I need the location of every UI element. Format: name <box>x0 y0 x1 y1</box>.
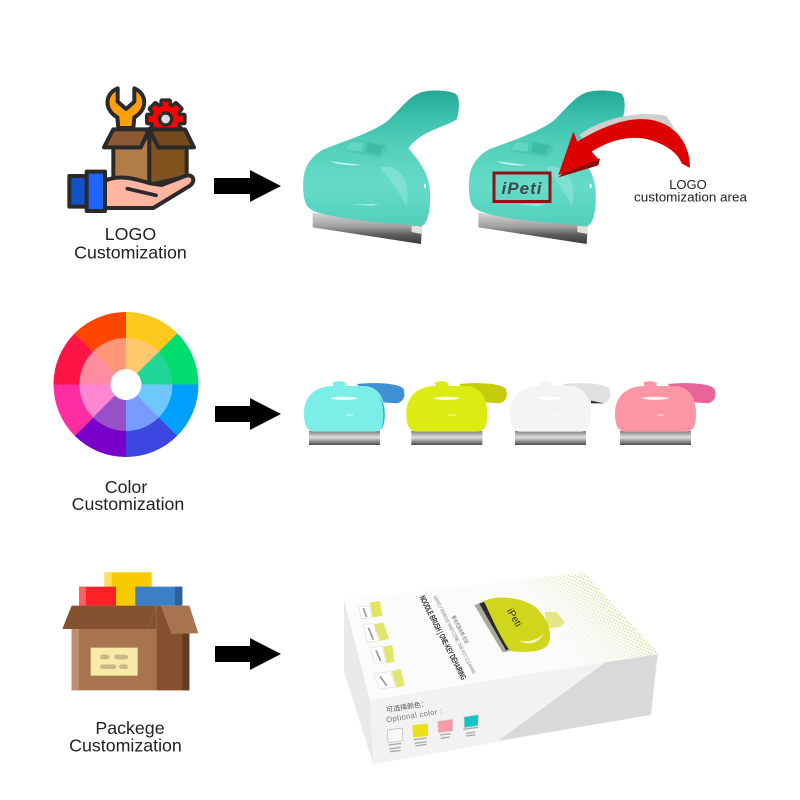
optional colour panel <box>386 699 478 752</box>
lid headline text: 推毛式脱毛梳 拉钮 <box>450 614 470 645</box>
product photo on lid <box>474 598 565 652</box>
icon: colour wheel <box>53 312 199 457</box>
heading: Packege Customization: Packege <box>95 718 165 738</box>
heading: Packege Customization: Customization <box>69 736 182 756</box>
heading: LOGO Customization: LOGO <box>105 224 156 244</box>
optional colour panel: 可选择颜色： <box>386 699 428 714</box>
heading: Color Customization: Customization <box>72 494 184 514</box>
arrow: colour row <box>215 398 281 430</box>
callout: LOGO customization area: customization area <box>634 190 748 204</box>
lid headline text: NOODLE BRUSH | ONE-KEY DEHAIRING <box>418 594 469 681</box>
product photo on lid: iPeti <box>504 607 523 629</box>
logo box: iPeti: iPeti <box>502 179 543 198</box>
callout: LOGO customization area: LOGO <box>669 177 707 192</box>
heading: LOGO Customization: Customization <box>74 242 187 262</box>
feature tags <box>359 601 405 689</box>
icon: hand holding box with tools <box>69 88 194 211</box>
arrow: logo row <box>214 170 281 202</box>
logo box: iPeti <box>494 173 550 202</box>
product row: four colour variants <box>304 381 715 445</box>
arrow: package row <box>215 638 281 670</box>
icon: open package box <box>62 572 198 690</box>
lid headline text: GENTLY REMOVE HAIR COMB, ONE-KEY CLEANING <box>432 595 477 675</box>
variant: white <box>510 381 610 445</box>
variant: pink <box>615 381 715 445</box>
optional colour panel: Optional color : <box>386 707 443 724</box>
product: teal grooming tool with logo <box>469 90 625 244</box>
lid headline text <box>418 594 477 681</box>
box faces <box>344 572 658 764</box>
heading: Color Customization: Color <box>105 477 147 497</box>
package box <box>344 572 658 764</box>
arrow: red curved pointer <box>558 114 690 177</box>
variant: cyan <box>304 381 404 445</box>
variant: yellow <box>406 381 507 445</box>
product: teal grooming tool <box>303 90 459 244</box>
